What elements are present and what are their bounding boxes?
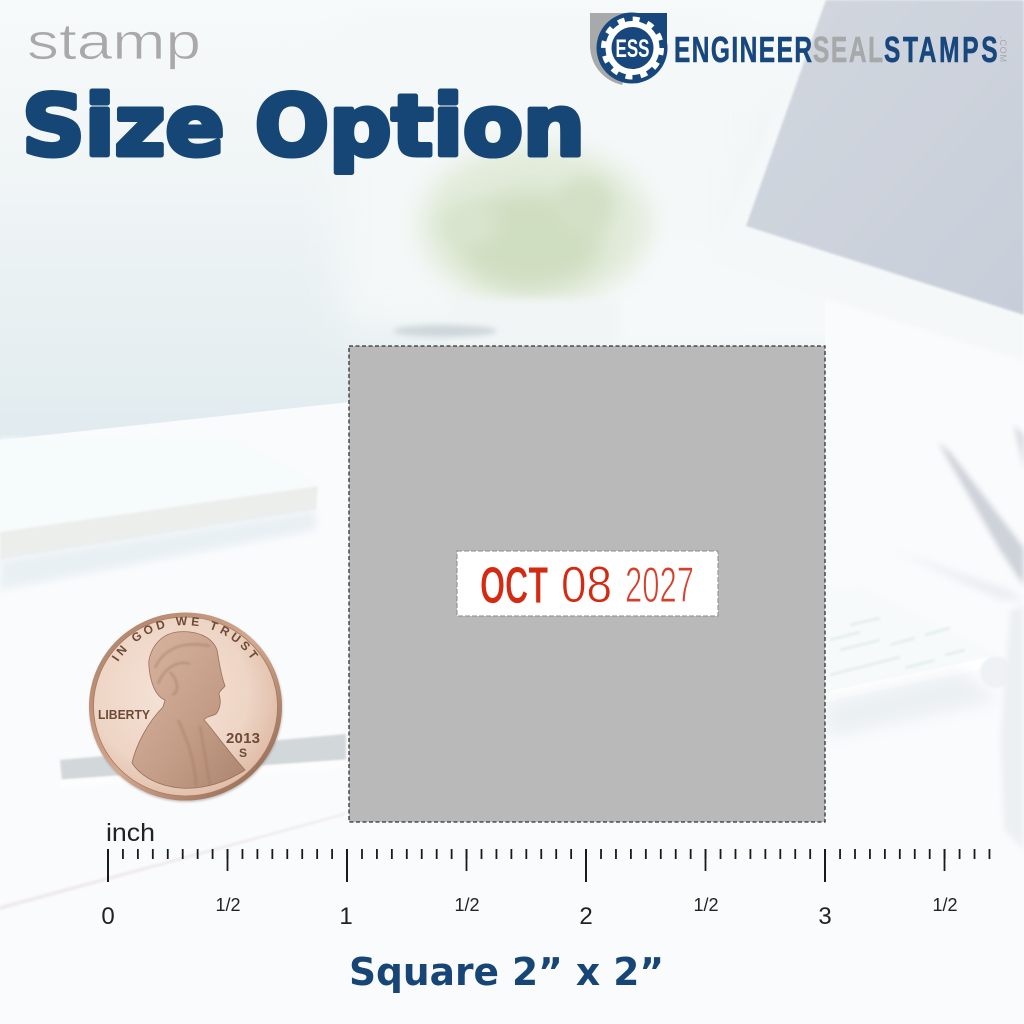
ruler minor ticks [123,849,989,859]
logo badge: ESS [616,35,650,63]
ruler inch numbers: 0 [101,903,115,930]
ruler inch ticks [108,849,825,882]
background: pen behind the coin [60,734,346,780]
ruler half labels: 1/2 [454,895,480,915]
penny hair shading [155,644,210,786]
ruler inch numbers: 1 [339,903,353,930]
imprint: white date band [457,551,718,616]
logo: Engineer Seal Stamps: .COM [998,36,1008,62]
background: plant [393,145,650,346]
ruler inch numbers: 2 [579,903,593,930]
logo badge [590,12,668,85]
title: Size Option [22,77,585,175]
ruler [101,819,989,930]
imprint: white date band: 08 [561,556,612,613]
stamp subtitle: stamp [27,13,201,70]
ruler unit label: inch [106,819,155,847]
ruler half labels: 1/2 [215,895,241,915]
ruler inch numbers: 3 [818,903,832,930]
imprint: white date band: 2027 [625,557,694,613]
logo: Engineer Seal Stamps: STAMPS [884,29,998,70]
background: desk reflection line [0,813,345,910]
logo: Engineer Seal Stamps: SEAL [813,29,883,70]
penny for scale: LIBERTY [98,708,151,722]
logo: Engineer Seal Stamps [590,12,1008,85]
size caption: Square 2” x 2” [349,950,664,994]
penny for scale: S [239,746,247,760]
background: notebook [0,438,318,590]
penny bust [132,632,245,788]
background: monitor [746,0,1024,316]
ruler inch numbers [101,903,832,930]
stamp area: 2 inch square [349,346,825,822]
background: keyboard [828,616,1004,734]
penny for scale: 2013 [226,730,260,747]
penny inscriptions: IN GOD WE TRUST [112,616,258,662]
date text: OCT [480,557,548,615]
penny for scale [88,612,284,803]
logo wordmark: ENGINEER [674,29,812,70]
ruler half labels: 1/2 [693,895,719,915]
ruler half labels: 1/2 [932,895,958,915]
ruler half labels [215,895,958,915]
background: pencils and cup [940,427,1024,844]
ruler half-inch ticks [228,849,944,871]
